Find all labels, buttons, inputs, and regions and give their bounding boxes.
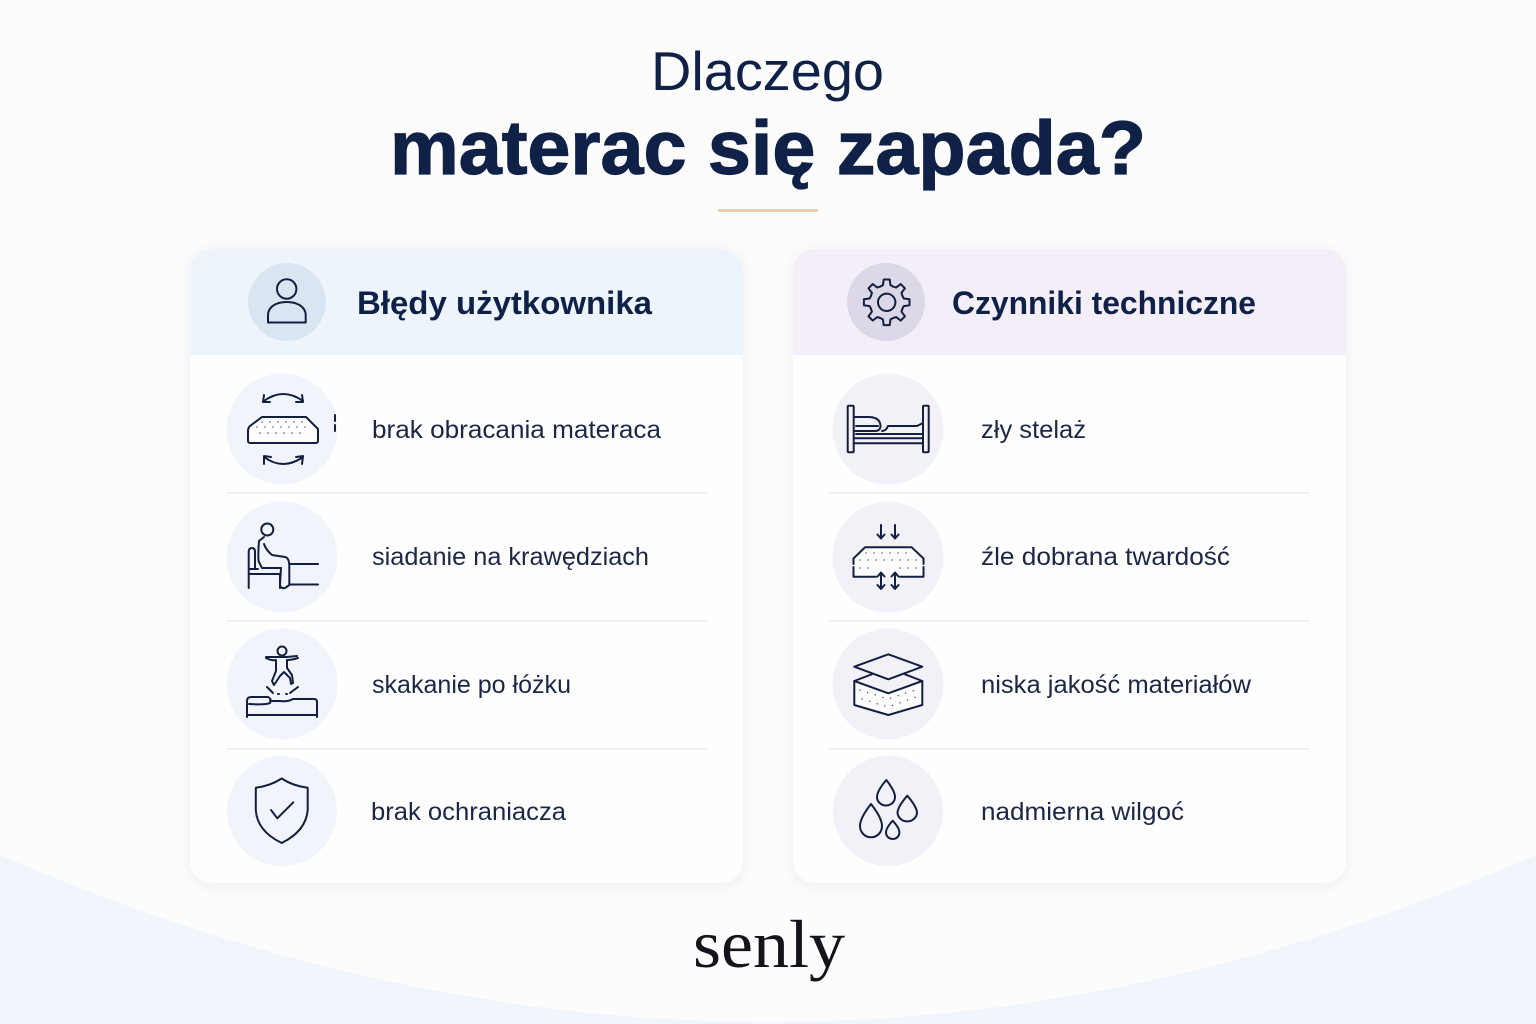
panel: technical factors — [793, 249, 1346, 883]
title line 2: materac się zapada? — [390, 106, 1146, 191]
row: low-quality materials — [832, 628, 1252, 740]
icon: gear — [847, 263, 925, 341]
label: brak obracania materaca — [372, 416, 661, 444]
row: wrong firmness — [832, 502, 1230, 612]
logo: senly — [693, 906, 845, 982]
icon: person — [248, 263, 326, 341]
panel: user errors — [190, 249, 743, 883]
icon: person jumping on bed — [226, 628, 338, 740]
heading: technical factors: Czynniki techniczne — [952, 285, 1256, 321]
row: jumping on bed — [226, 628, 571, 740]
icon: water drops — [833, 756, 943, 866]
label: brak ochraniacza — [371, 798, 566, 826]
row: sitting on edges — [226, 502, 649, 612]
label: źle dobrana twardość — [981, 543, 1230, 571]
label: skakanie po łóżku — [372, 671, 571, 699]
label: nadmierna wilgoć — [981, 798, 1184, 826]
icon: material layers — [832, 628, 944, 740]
heading: user errors: Błędy użytkownika — [357, 285, 652, 321]
icon: bed frame — [832, 374, 944, 484]
label: siadanie na krawędziach — [372, 543, 649, 571]
row: bad frame — [832, 374, 1086, 484]
background wave — [0, 855, 1536, 1024]
icon: person sitting on bed edge — [226, 502, 338, 612]
label: zły stelaż — [981, 416, 1086, 444]
panel header: technical factors — [793, 249, 1346, 355]
label: niska jakość materiałów — [981, 671, 1252, 699]
title divider — [718, 209, 818, 212]
row: excess moisture — [833, 756, 1184, 866]
row: no protector — [227, 756, 566, 866]
row: no mattress rotation — [226, 374, 661, 484]
panel header: user errors — [190, 249, 743, 355]
icon: mattress compressed by arrows — [832, 502, 944, 612]
title — [390, 40, 1146, 191]
title line 1: Dlaczego — [651, 40, 884, 102]
icon: shield with check — [227, 756, 337, 866]
icon: rotating mattress — [226, 374, 338, 484]
